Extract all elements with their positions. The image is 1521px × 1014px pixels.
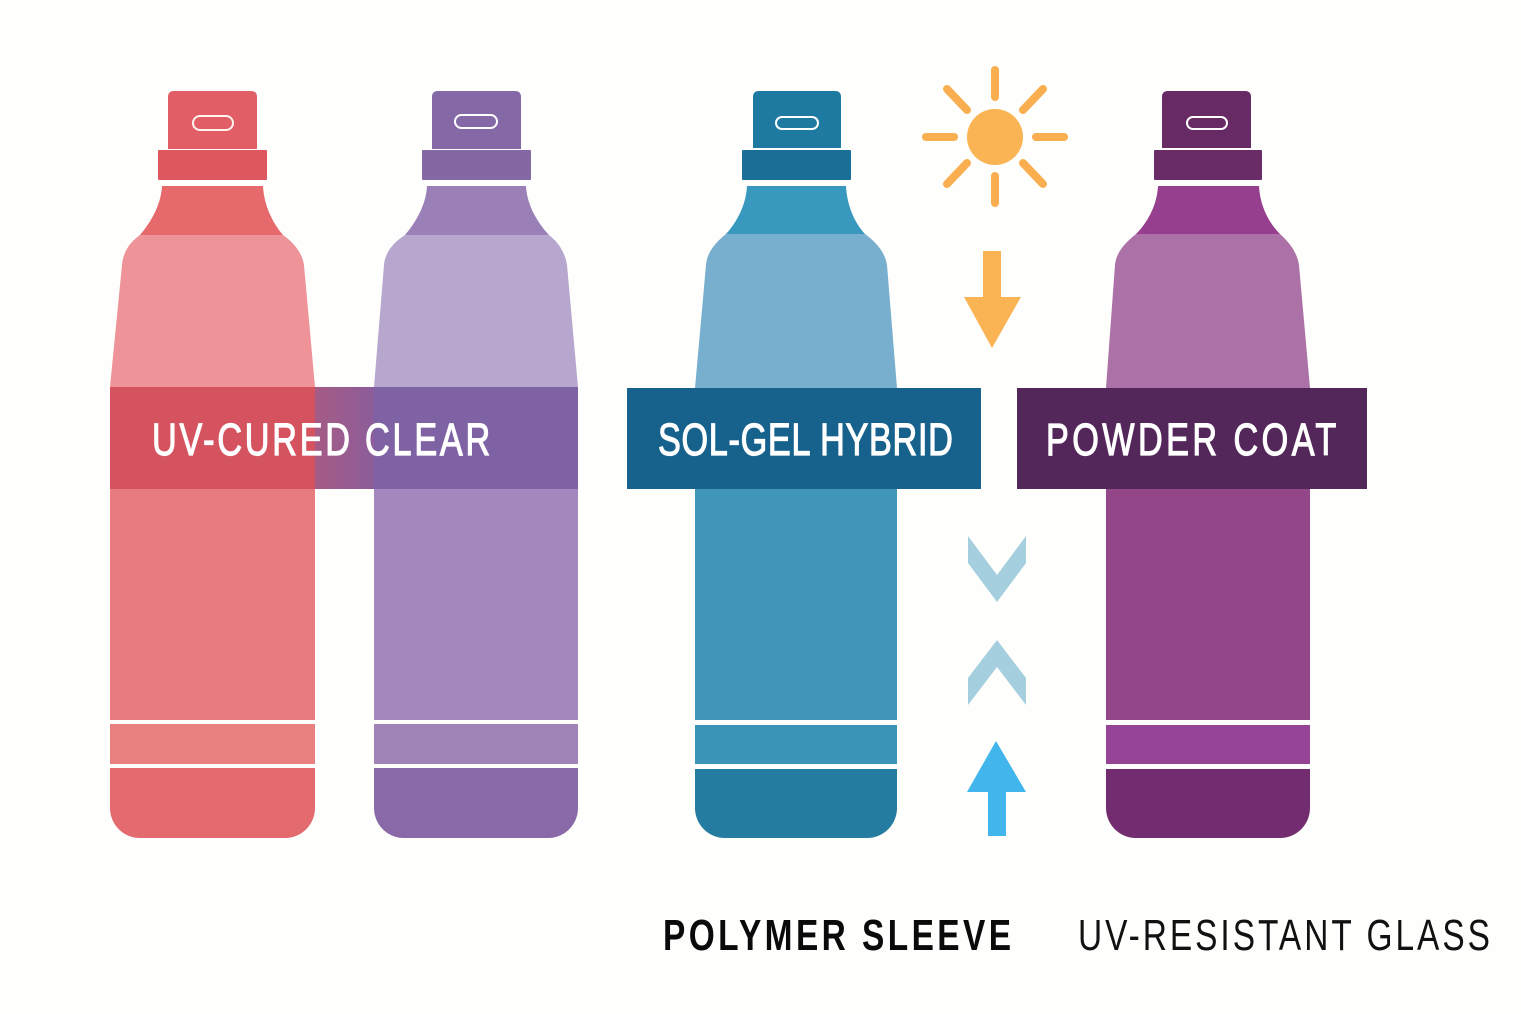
red upper panel [110, 235, 315, 387]
plum neck [1136, 186, 1280, 234]
plum base [1106, 769, 1310, 838]
icon: sun [926, 70, 1064, 203]
red collar [158, 150, 267, 180]
red cap slot [193, 116, 233, 130]
blue stripe [695, 725, 897, 764]
bottle: UV-cured (red) [110, 91, 315, 838]
caption: polymer sleeve: POLYMER SLEEVE [663, 912, 1011, 960]
purple bottle cap [432, 91, 521, 149]
blue upper panel [695, 234, 897, 388]
band purple segment [374, 387, 578, 489]
plum bottle cap [1162, 91, 1251, 148]
band overlap segment [315, 387, 374, 489]
red base [110, 768, 315, 838]
purple stripe [374, 724, 578, 764]
purple lower body [374, 489, 578, 720]
red lower body [110, 489, 315, 720]
plum upper panel [1106, 234, 1310, 388]
red stripe [110, 724, 315, 764]
arrow: blue pointing up [967, 741, 1026, 836]
label text: powder coat: POWDER COAT [1046, 416, 1336, 465]
label text: UV-cured clear: UV-CURED CLEAR [152, 416, 490, 465]
purple base [374, 768, 578, 838]
bottle: powder coat (plum) [1106, 91, 1310, 838]
label band: UV-cured clear [110, 387, 578, 489]
plum stripe [1106, 725, 1310, 764]
icon: downward chevron [968, 536, 1026, 602]
arrow: sunlight pointing down [964, 251, 1021, 348]
purple cap slot [455, 115, 497, 128]
blue base [695, 769, 897, 838]
blue lower body [695, 489, 897, 720]
plum collar [1154, 150, 1262, 180]
purple neck [405, 186, 549, 235]
caption: UV-resistant glass: UV-RESISTANT GLASS [1078, 912, 1490, 960]
bottle: clear (purple) [374, 91, 578, 838]
blue cap slot [776, 117, 818, 129]
icon: upward chevron [968, 640, 1026, 705]
label text: sol-gel hybrid: SOL-GEL HYBRID [658, 416, 953, 465]
label band: sol-gel hybrid [627, 388, 981, 489]
powder coat band [1017, 388, 1367, 489]
red bottle cap [168, 91, 257, 149]
purple collar [422, 150, 531, 180]
blue collar [742, 150, 851, 180]
band red segment [110, 387, 315, 489]
sol-gel band [627, 388, 981, 489]
blue neck [726, 186, 865, 234]
label band: powder coat [1017, 388, 1367, 489]
purple upper panel [374, 235, 578, 387]
bottle: sol-gel (blue) [695, 91, 897, 838]
blue bottle cap [753, 91, 841, 148]
plum cap slot [1187, 117, 1227, 129]
red neck [140, 186, 283, 235]
plum lower body [1106, 489, 1310, 720]
